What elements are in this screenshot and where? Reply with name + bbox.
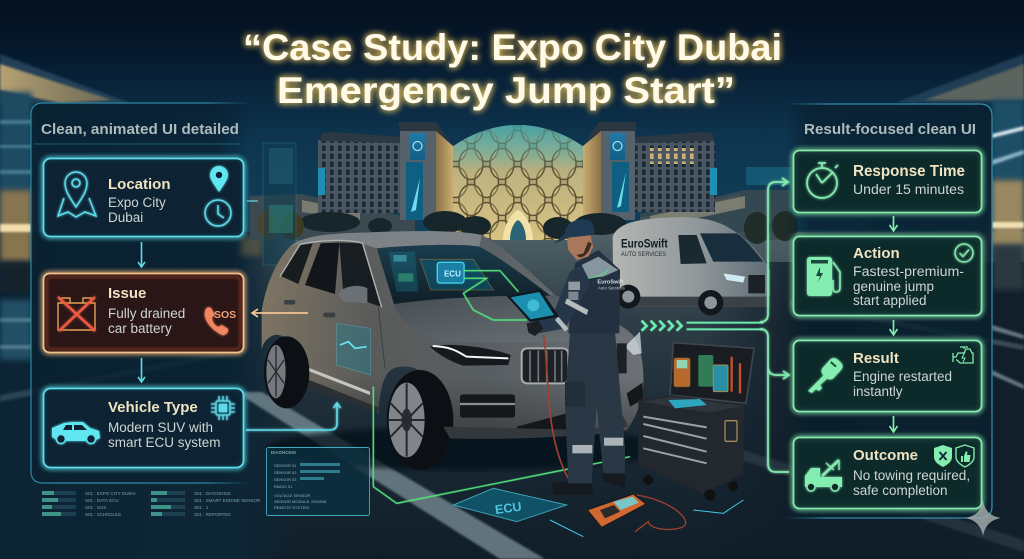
icon: cross shield [934, 445, 952, 467]
right hotel [583, 122, 717, 220]
icon: crossed battery [58, 297, 95, 331]
diagnostic log panel: SENSOR 01 [274, 463, 297, 468]
data rows bottom left: S01 : SMART ENGINE SENSOR [194, 498, 261, 503]
card: location [44, 158, 244, 236]
text: outcome: No towing required, [853, 468, 970, 483]
ground ECU projection [373, 387, 743, 537]
multimeter on ground [587, 494, 686, 532]
data rows bottom left [42, 491, 261, 517]
jacket [568, 250, 620, 333]
data rows bottom left: S01 : SOS [85, 505, 106, 510]
face and cap [567, 233, 593, 260]
text: result: instantly [853, 384, 903, 399]
icon: tow truck [805, 460, 842, 491]
title [243, 27, 782, 111]
card: vehicle type [44, 388, 244, 468]
icon: ECU chip [211, 396, 235, 420]
heading: right panel: Result-focused clean UI [804, 122, 976, 138]
left hotel [318, 122, 453, 220]
connector: location link [247, 200, 258, 202]
icon: check circle [955, 244, 973, 262]
icon: charger pump [807, 257, 840, 296]
icon: thumbs-up shield [956, 445, 974, 467]
text: location: Location [108, 176, 170, 193]
text: action: start applied [853, 293, 927, 308]
title: “Case Study: Expo City Dubai [243, 27, 782, 68]
text: location: Dubai [108, 210, 143, 225]
arrow: car issue to card [252, 312, 308, 314]
blurred street scenery left [0, 54, 262, 360]
icon: sparkle watermark [965, 500, 1001, 536]
toolbox [638, 343, 754, 501]
low walls and far scenery [250, 190, 790, 240]
diagnostic log panel: SENSOR MODULE, ENGINE [274, 499, 327, 504]
text: outcome [853, 447, 970, 498]
text: vehicle type [108, 399, 221, 450]
text: action: Action [853, 245, 900, 262]
connector: to response time [760, 182, 788, 322]
dome [448, 125, 588, 240]
data rows bottom left: S01 : 1 [194, 505, 209, 510]
text: action: Fastest-premium- [853, 264, 964, 279]
trousers [565, 332, 625, 483]
SUV body [262, 231, 643, 470]
rear wheel [264, 336, 309, 408]
card: response time [794, 150, 982, 212]
text: action [853, 245, 964, 308]
arrow: response to action [892, 216, 894, 231]
illustration: van, SUV, technician and toolbox [262, 217, 770, 537]
heading: left panel: Clean, animated UI detailed [41, 122, 239, 138]
glove [527, 321, 543, 336]
text: vehicle type: Modern SUV with [108, 420, 213, 435]
text: result: Result [853, 350, 899, 367]
diagnostic log panel [266, 448, 370, 516]
ground ECU projection: ECU [494, 500, 523, 517]
arrow: result to outcome [892, 416, 894, 432]
text: issue [108, 285, 185, 336]
data rows bottom left: S01 : REPORTED [194, 512, 231, 517]
panel: left details [31, 103, 250, 483]
text: vehicle type: Vehicle Type [108, 399, 198, 416]
diagnostic log panel: REMOTE SYSTEM [274, 505, 309, 510]
data rows bottom left: S01 : SCHEDULE [85, 512, 121, 517]
data rows bottom left: S01 : DATA ECU [85, 498, 119, 503]
text: issue: Fully drained [108, 306, 185, 321]
arrow: vehicle card to SUV [246, 403, 337, 430]
icon: stopwatch [807, 163, 838, 198]
illustration: Expo City skyline with dome and hotels [250, 122, 798, 265]
windshield ECU hologram: ECU [444, 269, 461, 278]
card: issue [44, 274, 244, 352]
data rows bottom left: S01 : EXPO CITY DUBAI [85, 491, 136, 496]
service van [613, 217, 770, 315]
icon: map pin [58, 172, 96, 217]
mirror [338, 286, 367, 303]
text: outcome: Outcome [853, 447, 918, 464]
technician: Auto Services [598, 285, 625, 290]
chevrons pointing to right [642, 321, 763, 331]
service van: AUTO SERVICES [621, 251, 666, 258]
tablet [507, 289, 559, 322]
card: outcome [794, 438, 982, 508]
icon: small location pin [210, 166, 228, 192]
icon: SOS phone: SOS [214, 309, 236, 321]
diagnostic log panel: VOLTAGE SENSOR [274, 493, 310, 498]
card: action [794, 236, 982, 316]
text: action: genuine jump [853, 279, 934, 294]
arrow: issue to vehicle [140, 358, 142, 382]
panel: right results [785, 104, 992, 518]
text: response time: Response Time [853, 163, 965, 180]
card: result [794, 340, 982, 412]
front fascia [430, 332, 643, 439]
title: Emergency Jump Start” [277, 70, 735, 111]
van logo text: EuroSwift [621, 237, 668, 251]
text: issue: car battery [108, 321, 172, 336]
icon: SUV [52, 422, 100, 444]
boots [552, 472, 625, 495]
blurred street scenery right [895, 54, 1024, 389]
diagnostic log panel: DIAGNOSIS [271, 450, 296, 455]
text: response time [853, 163, 965, 197]
icon: SOS phone [205, 307, 236, 335]
diagnostic log panel: RADIO 01 [274, 484, 293, 489]
text: location: Expo City [108, 195, 166, 210]
text: issue: Issue [108, 285, 146, 302]
icon: engine [953, 347, 973, 363]
technician [507, 219, 625, 495]
holographic data strip near dome [263, 143, 791, 265]
cable [543, 335, 568, 478]
icon: car key [808, 356, 845, 393]
trees [258, 209, 798, 244]
arrow: action to result [892, 320, 894, 335]
diagnostic log panel: SENSOR 02 [274, 470, 297, 475]
windshield ECU hologram [388, 252, 527, 320]
text: outcome: safe completion [853, 483, 948, 498]
text: location [108, 176, 170, 225]
connector: to result and outcome [760, 329, 789, 472]
text: result [853, 350, 952, 399]
arrow: location to issue [140, 242, 142, 267]
text: response time: Under 15 minutes [853, 182, 964, 197]
data rows bottom left: S01 : DIAGNOSIS [194, 491, 231, 496]
text: vehicle type: smart ECU system [108, 435, 221, 450]
door hologram [337, 323, 371, 375]
technician: EuroSwift [597, 279, 624, 285]
icon: clock [205, 200, 231, 226]
diagnostic log panel: SENSOR 03 [274, 477, 297, 482]
ground shadow [267, 427, 667, 470]
text: result: Engine restarted [853, 369, 952, 384]
front wheel [387, 370, 453, 470]
